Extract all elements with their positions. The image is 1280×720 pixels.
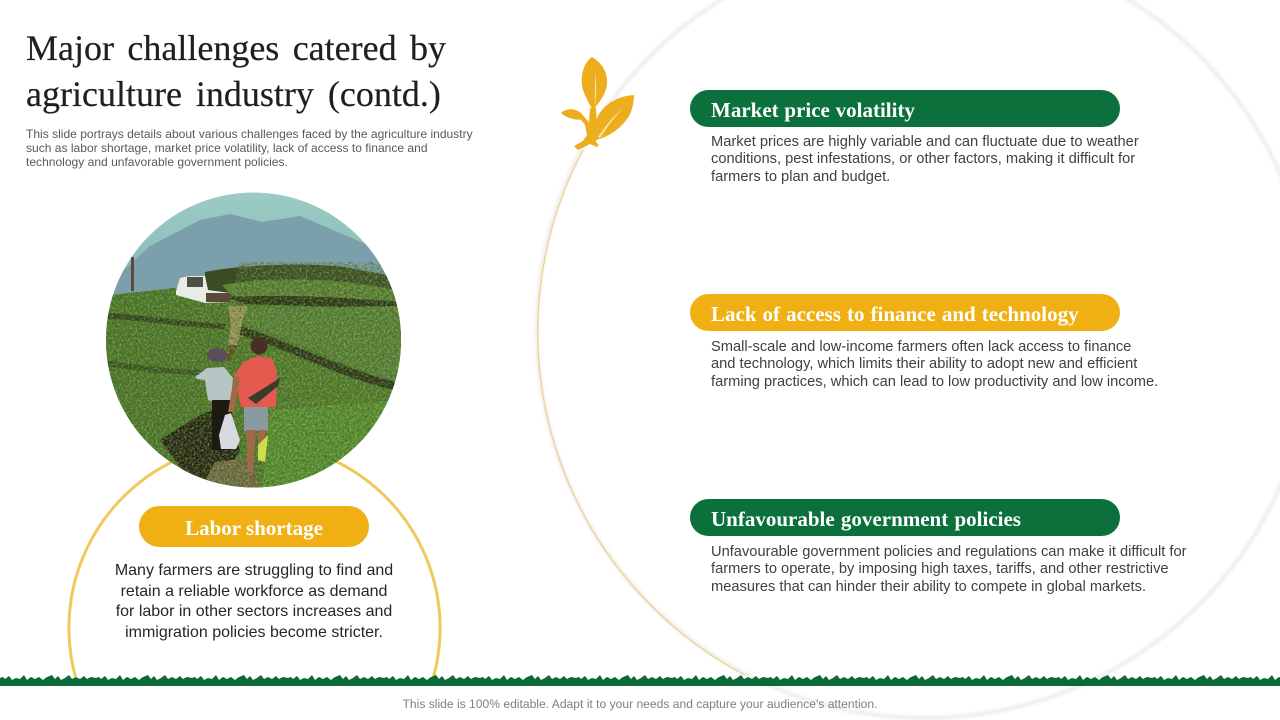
subtitle text: This slide portrays details about various challenges faced by the agriculture industry bbox=[26, 127, 473, 141]
finance text bbox=[711, 338, 1158, 390]
market price heading: Market price volatility bbox=[711, 98, 915, 122]
farmer woman bbox=[195, 348, 233, 450]
subtitle text: such as labor shortage, market price volatility, lack of access to finance and bbox=[26, 141, 428, 155]
title bbox=[26, 28, 446, 114]
labor shortage text bbox=[115, 562, 393, 641]
labor shortage pill: Labor shortage bbox=[185, 516, 323, 540]
title: agriculture industry (contd.) bbox=[26, 74, 441, 114]
market price text bbox=[711, 134, 1139, 184]
government text bbox=[711, 544, 1187, 594]
big circle soft edge bbox=[537, 0, 1280, 718]
government heading bbox=[690, 499, 1120, 536]
labor shortage text: for labor in other sectors increases and bbox=[116, 603, 392, 620]
finance heading: Lack of access to finance and technology bbox=[711, 302, 1079, 326]
labor shortage text: immigration policies become stricter. bbox=[125, 624, 383, 641]
labor shortage text: Many farmers are struggling to find and bbox=[115, 562, 393, 579]
photo: farmers in tea field bbox=[100, 190, 410, 500]
government text: farmers to operate, by imposing high taxes, tariffs, and other restrictive bbox=[711, 561, 1169, 577]
market price heading bbox=[690, 90, 1120, 127]
subtitle text bbox=[26, 127, 473, 169]
government text: Unfavourable government policies and regulations can make it difficult for bbox=[711, 544, 1187, 560]
farmer man in red shirt bbox=[219, 338, 280, 472]
finance text: and technology, which limits their ability to adopt new and efficient bbox=[711, 356, 1137, 372]
labor shortage pill bbox=[139, 506, 369, 547]
icon: golden leaf sprout bbox=[561, 57, 634, 150]
finance text: Small-scale and low-income farmers often lack access to finance bbox=[711, 338, 1131, 354]
finance heading bbox=[690, 294, 1120, 331]
big circle yellow arc bbox=[538, 150, 745, 675]
government heading: Unfavourable government policies bbox=[711, 507, 1021, 531]
truck bbox=[176, 276, 230, 303]
government text: measures that can hinder their ability to compete in global markets. bbox=[711, 578, 1146, 594]
labor shortage text: retain a reliable workforce as demand bbox=[121, 583, 387, 600]
subtitle text: technology and unfavorable government policies. bbox=[26, 155, 288, 169]
footer note: This slide is 100% editable. Adapt it to your needs and capture your audience's attention. bbox=[403, 697, 877, 711]
market price text: farmers to plan and budget. bbox=[711, 168, 890, 184]
left yellow arch bbox=[69, 460, 440, 677]
market price text: Market prices are highly variable and can fluctuate due to weather bbox=[711, 134, 1139, 150]
green grass strip bbox=[0, 674, 1280, 686]
finance text: farming practices, which can lead to low productivity and low income. bbox=[711, 374, 1158, 390]
market price text: conditions, pest infestations, or other factors, making it difficult for bbox=[711, 151, 1135, 167]
title: Major challenges catered by bbox=[26, 28, 446, 68]
